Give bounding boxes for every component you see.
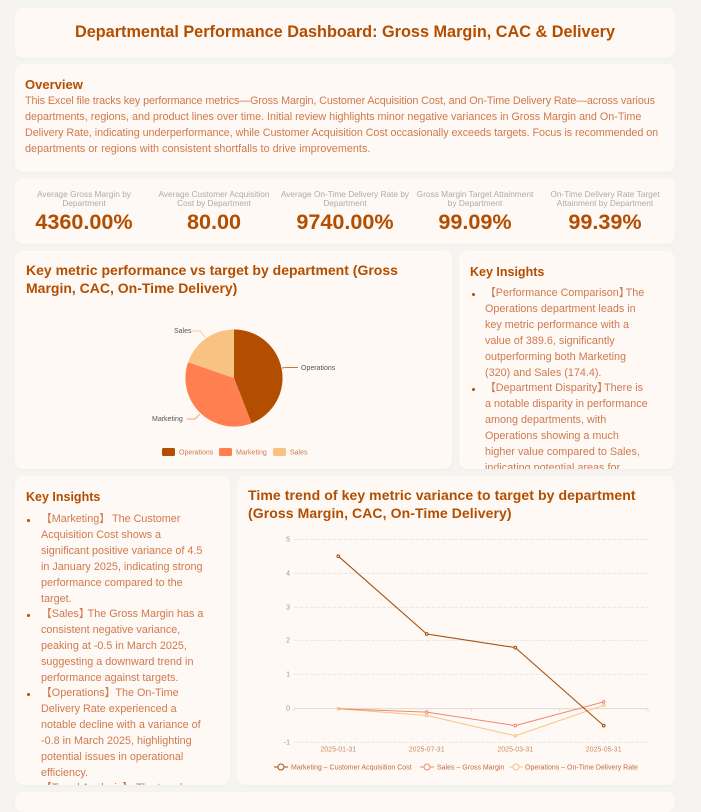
KPI: average CAC: Cost by Department — [177, 198, 251, 208]
panel: line chart — [237, 476, 675, 785]
x axis labels: 2025-05-31 — [586, 746, 622, 754]
KPI: gross margin attainment: Gross Margin Target Attainment — [417, 189, 533, 199]
insights list: performance against targets. — [41, 672, 178, 684]
insights list: efficiency. — [41, 767, 88, 779]
title panel — [15, 8, 675, 58]
line chart legend: Operations – On-Time Delivery Rate — [525, 764, 638, 772]
x axis labels — [320, 746, 622, 754]
KPI: average CAC: 80.00 — [187, 209, 241, 234]
line chart heading — [248, 487, 636, 521]
x axis labels: 2025-01-31 — [320, 746, 356, 754]
panel: pie chart — [15, 251, 452, 469]
insights list: target. — [41, 593, 72, 605]
insights list: potential issues in operational — [41, 751, 183, 763]
insights list — [472, 287, 648, 469]
insights list: -0.8 in March 2025, highlighting — [41, 735, 192, 747]
y axis labels: 2 — [286, 638, 290, 644]
panel: key insights left — [15, 476, 230, 785]
KPI: delivery attainment: 99.39% — [568, 209, 642, 234]
insights list: a notable disparity in performance — [485, 398, 648, 410]
insights list: Delivery Rate experienced a — [41, 703, 177, 715]
overview text: departments or regions with consistent shortfalls to drive improvements. — [25, 143, 370, 155]
panel: overview — [15, 64, 675, 172]
line chart legend: Marketing – Customer Acquisition Cost — [291, 764, 412, 772]
pie legend: Operations — [179, 450, 214, 456]
KPI: gross margin attainment — [417, 189, 534, 234]
insights list: value of 389.6, significantly — [485, 335, 615, 347]
insights list — [27, 513, 204, 785]
panel: key insights right — [459, 251, 675, 469]
overview text: Delivery Rate, indicating underperformance, while Customer Acquisition Cost occasionally exceeds targets. Focus is recommended on — [25, 127, 658, 139]
overview text: departments, regions, and product lines over time. Initial review highlights minor negative variances in Gross Margin and On-Time — [25, 111, 641, 123]
insights list: (320) and Sales (174.4). — [485, 367, 601, 379]
KPI: average on-time delivery: Average On-Time Delivery Rate by — [281, 189, 409, 199]
line: marketing CAC — [337, 555, 605, 727]
KPI: average on-time delivery: 9740.00% — [296, 209, 394, 234]
insights list: 【Performance Comparison】The — [485, 287, 644, 299]
line chart legend — [274, 764, 638, 772]
insights list: Acquisition Cost shows a — [41, 529, 161, 541]
y axis labels: 0 — [286, 706, 290, 712]
pie legend: Sales — [290, 450, 308, 456]
insights list: 【Operations】 The On-Time — [41, 687, 179, 699]
KPI: average CAC: Average Customer Acquisition — [158, 189, 270, 199]
x axis labels: 2025-07-31 — [409, 746, 445, 754]
overview text — [25, 95, 658, 155]
pie legend — [162, 448, 308, 456]
KPI: average gross margin: Department — [62, 198, 106, 208]
KPI: average gross margin — [35, 189, 133, 234]
title: Departmental Performance Dashboard: Gross Margin, CAC & Delivery — [75, 23, 615, 41]
KPI: average gross margin: 4360.00% — [35, 209, 133, 234]
insights list: Operations department leads in — [485, 303, 636, 315]
insights list: in January 2025, indicating strong — [41, 561, 202, 573]
insights list: peaking at -0.5 in March 2025, — [41, 640, 187, 652]
KPI: average gross margin: Average Gross Margin by — [37, 189, 131, 199]
overview heading: Overview — [25, 77, 83, 92]
label: sales: Sales — [174, 328, 192, 335]
insights list: 【Sales】 The Gross Margin has a — [41, 608, 203, 620]
x axis labels: 2025-03-31 — [497, 746, 533, 754]
KPI: delivery attainment — [550, 189, 660, 234]
KPI: average CAC — [158, 189, 270, 234]
label: marketing — [152, 414, 200, 423]
y axis labels: 5 — [286, 536, 290, 544]
pie legend: Marketing — [236, 450, 267, 456]
insights list: outperforming both Marketing — [485, 351, 626, 363]
label: marketing: Marketing — [152, 416, 183, 423]
insights list: 【Marketing】 The Customer — [41, 513, 180, 525]
insights list: Operations showing a much — [485, 430, 619, 442]
insights heading: Key Insights — [26, 490, 100, 504]
pie chart heading: Margin, CAC, On-Time Delivery) — [26, 280, 237, 296]
insights list: notable decline with a variance of — [41, 719, 201, 731]
y axis labels: 1 — [286, 672, 290, 678]
panel: next section edge — [15, 792, 675, 812]
pie chart heading — [26, 262, 398, 296]
panel: KPI cards — [15, 178, 675, 244]
line chart legend: Sales – Gross Margin — [437, 764, 504, 772]
insights list: among departments, with — [485, 414, 606, 426]
KPI: gross margin attainment: by Department — [448, 198, 502, 208]
line chart heading: (Gross Margin, CAC, On-Time Delivery) — [248, 505, 512, 521]
insights heading: Key Insights — [470, 265, 544, 279]
x axis — [294, 709, 648, 711]
KPI: delivery attainment: On-Time Delivery Rate Target — [550, 189, 660, 199]
insights list: significant positive variance of 4.5 — [41, 545, 202, 557]
label: operations — [282, 365, 336, 372]
y axis labels: -1 — [284, 740, 290, 746]
insights list: consistent negative variance, — [41, 624, 180, 636]
insights list: suggesting a downward trend in — [41, 656, 193, 668]
y axis labels: 3 — [286, 604, 290, 612]
line chart heading: Time trend of key metric variance to target by department — [248, 487, 636, 503]
y axis labels: 4 — [286, 570, 290, 578]
label: sales — [174, 328, 205, 337]
KPI: gross margin attainment: 99.09% — [438, 209, 512, 234]
KPI: delivery attainment: Attainment by Department — [557, 198, 653, 208]
insights list: key metric performance with a — [485, 319, 629, 331]
label: operations: Operations — [301, 365, 336, 372]
line: operations on-time delivery — [337, 704, 605, 737]
insights list: higher value compared to Sales, — [485, 446, 640, 458]
pie slices — [185, 329, 283, 427]
insights list: performance compared to the — [41, 577, 183, 589]
insights list: 【Department Disparity】There is — [485, 382, 643, 394]
overview text: This Excel file tracks key performance metrics—Gross Margin, Customer Acquisition Cost, and On-Time Delivery Rate—across various — [25, 95, 655, 107]
pie chart heading: Key metric performance vs target by department (Gross — [26, 262, 398, 278]
y axis labels — [284, 536, 290, 746]
KPI: average on-time delivery: Department — [323, 198, 367, 208]
pie chart — [152, 328, 336, 456]
KPI: average on-time delivery — [281, 189, 409, 234]
line: sales gross margin — [338, 701, 605, 727]
grid lines — [294, 539, 648, 742]
